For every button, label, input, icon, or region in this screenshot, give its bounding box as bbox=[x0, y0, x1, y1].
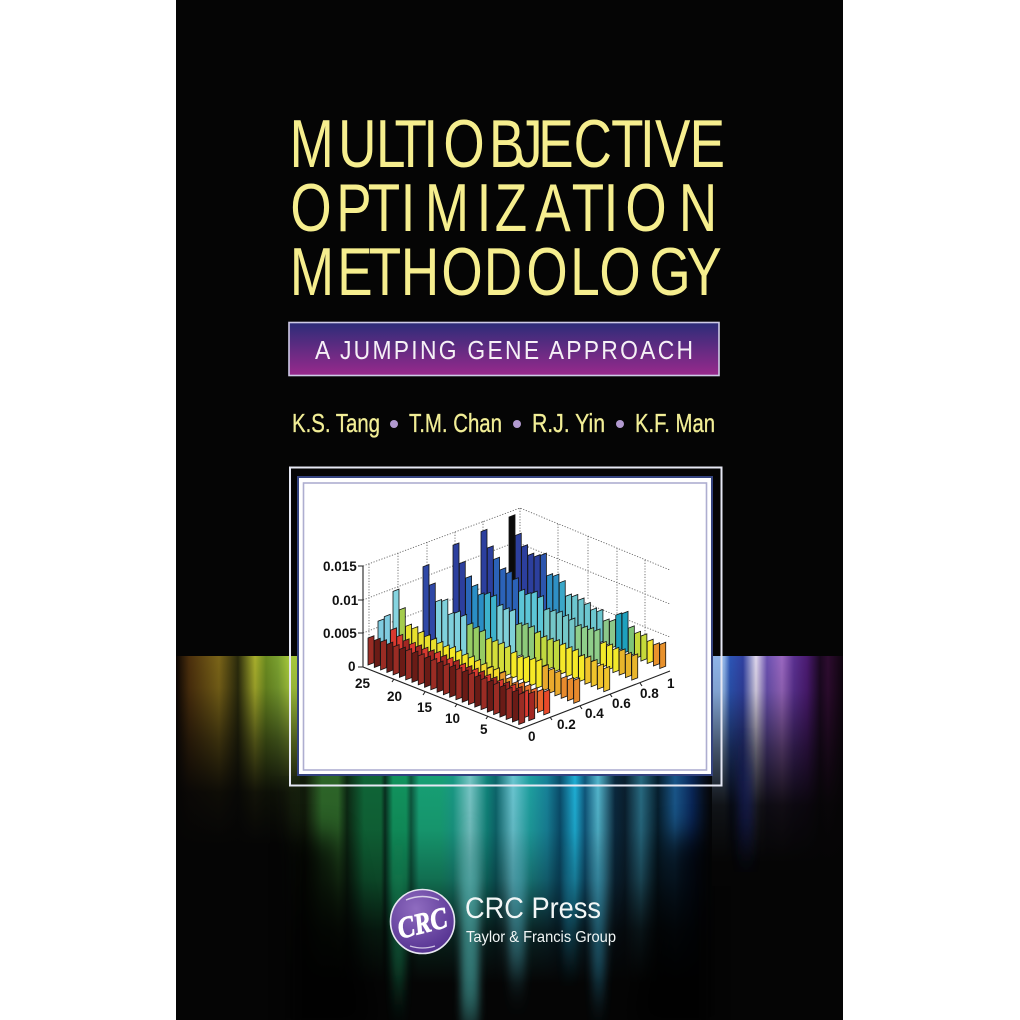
subtitle banner: A JUMPING GENE APPROACH bbox=[315, 337, 693, 365]
authors: T.M. Chan bbox=[409, 408, 502, 438]
authors: R.J. Yin bbox=[532, 408, 605, 438]
x axis labels: 25 bbox=[355, 676, 371, 691]
chart frame bbox=[290, 468, 722, 786]
bar row y=0.6 bbox=[453, 541, 610, 694]
publisher name: CRC Press bbox=[465, 892, 601, 925]
z axis labels: 0.01 bbox=[332, 593, 359, 608]
z axis labels bbox=[323, 559, 359, 674]
bar row y=0.2 bbox=[393, 587, 550, 717]
x axis labels: 5 bbox=[480, 722, 488, 737]
y axis labels: 0.8 bbox=[640, 686, 659, 701]
z axis labels: 0.005 bbox=[323, 626, 357, 641]
y axis labels: 0.2 bbox=[557, 717, 576, 732]
bar row y=0.1 bbox=[378, 610, 535, 723]
bar row y=0.4 bbox=[423, 562, 580, 706]
authors: K.F. Man bbox=[635, 408, 715, 438]
authors bbox=[292, 408, 715, 438]
z axis labels: 0.015 bbox=[323, 559, 357, 574]
bar row y=0.8 bbox=[481, 527, 638, 682]
title: METHODOLOGY bbox=[290, 234, 722, 309]
3D bar chart bbox=[323, 508, 675, 744]
x axis labels: 20 bbox=[387, 689, 402, 704]
publisher logo: CRC badge bbox=[390, 890, 454, 954]
bar row y=0 bbox=[368, 630, 525, 727]
y axis labels: 0.6 bbox=[612, 696, 631, 711]
title bbox=[290, 106, 725, 309]
title: OPTIMIZATION bbox=[290, 170, 717, 245]
publisher name bbox=[465, 892, 616, 946]
x axis labels bbox=[355, 676, 536, 744]
y axis labels: 0.4 bbox=[585, 706, 604, 721]
chart axes bbox=[358, 566, 670, 729]
publisher name: Taylor & Francis Group bbox=[466, 929, 616, 946]
book cover background bbox=[176, 0, 843, 1020]
spectrum band: right bbox=[712, 656, 843, 886]
bar row y=1 bbox=[509, 512, 666, 671]
spectrum band: centre bbox=[290, 776, 710, 1020]
spectrum band: left bbox=[176, 656, 300, 866]
subtitle banner bbox=[289, 322, 719, 376]
x axis labels: 0 bbox=[528, 729, 536, 744]
x axis labels: 10 bbox=[445, 711, 460, 726]
x axis labels: 15 bbox=[417, 700, 433, 715]
title: MULTIOBJECTIVE bbox=[290, 106, 725, 181]
chart gridlines bbox=[363, 508, 670, 650]
z axis labels: 0 bbox=[348, 659, 356, 674]
y axis labels: 1 bbox=[667, 676, 675, 691]
y axis labels bbox=[557, 676, 675, 732]
authors: K.S. Tang bbox=[292, 408, 380, 438]
publisher logo: CRC badge: CRC bbox=[394, 901, 451, 946]
